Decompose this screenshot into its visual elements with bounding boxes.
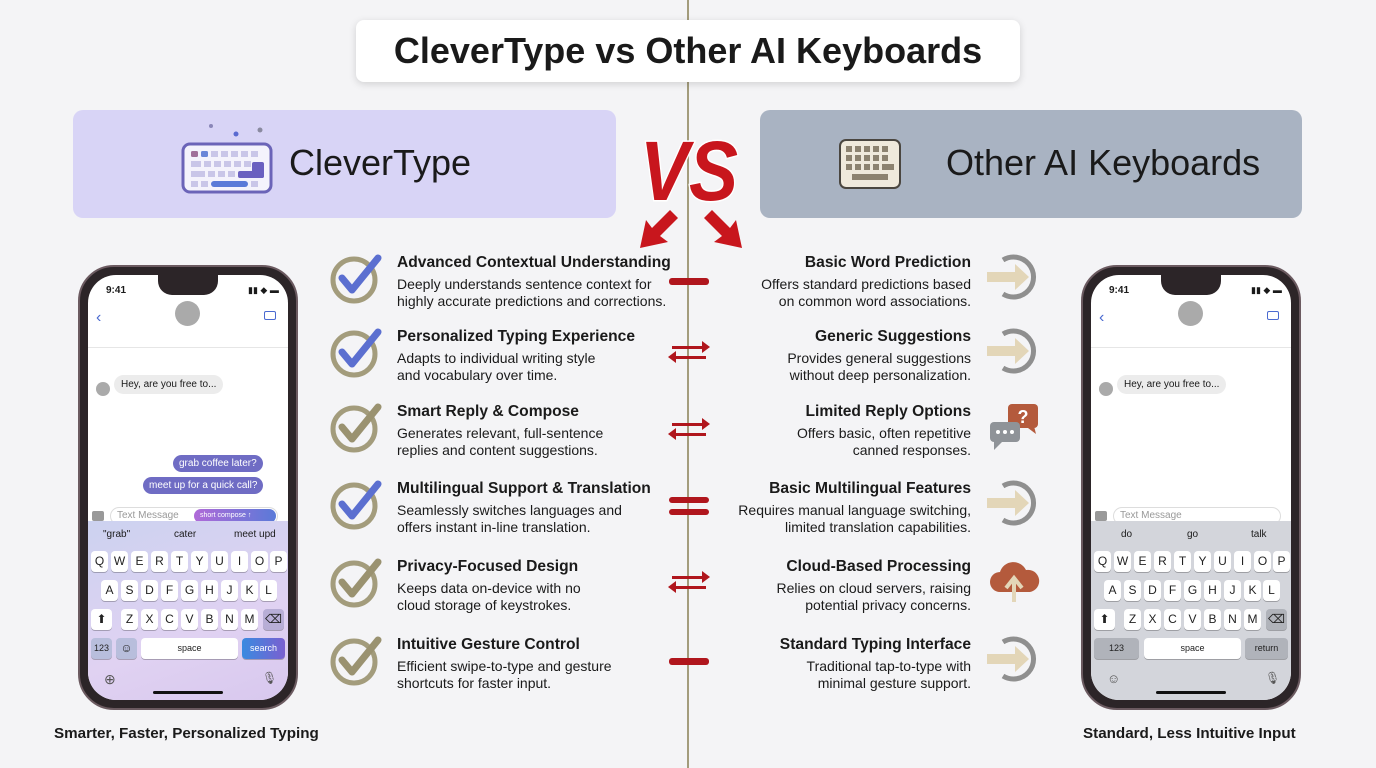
phone: CleverType: meet upd: [234, 529, 276, 540]
icon: arrow circle 2: [987, 328, 1036, 374]
row: Multilingual Support: Multilingual Support & Translation: [397, 480, 651, 497]
phone: Other keyboards: 🎙: [1265, 671, 1280, 685]
phone: Other keyboards: Y: [1198, 554, 1206, 568]
phone: Other keyboards: return: [1255, 643, 1278, 653]
icon: keyboard beige: [839, 139, 901, 189]
row: Basic Word Prediction: Offers standard predictions based: [761, 276, 971, 292]
phone: Other keyboards: Hey, are you free to...: [1124, 379, 1219, 390]
phone: Other keyboards: T: [1179, 554, 1186, 568]
center divider line: [687, 0, 689, 768]
phone: CleverType: C: [165, 612, 174, 626]
phone: CleverType: ⌫: [265, 612, 282, 626]
header: Other AI Keyboards: [760, 110, 1302, 218]
row: Standard Typing Interface: Standard Typing Interface: [780, 636, 971, 653]
phone: Other keyboards: do: [1121, 529, 1132, 540]
phone: CleverType: W: [114, 554, 125, 568]
icon: check 4: [330, 480, 382, 530]
row: Generic Suggestions: without deep personalization.: [790, 367, 971, 383]
phone: Other keyboards: F: [1169, 583, 1176, 597]
row: Cloud-Based Processing: potential privacy concerns.: [805, 597, 971, 613]
row: Basic Multilingual Features: limited translation capabilities.: [785, 519, 971, 535]
phone: CleverType: S: [125, 583, 134, 597]
phone: CleverType: G: [185, 583, 194, 597]
phone: CleverType: ☺: [120, 641, 133, 655]
phone: Other keyboards: ‹: [1099, 309, 1104, 326]
row: Personalized Typing Experience: [397, 328, 635, 383]
icon: arrow circle 4: [987, 636, 1036, 682]
phone: Other keyboards: 9:41: [1109, 285, 1129, 296]
phone: CleverType: ⬆: [96, 612, 107, 626]
phone: CleverType: "grab": [103, 529, 130, 540]
phone: CleverType: I: [238, 554, 241, 568]
phone: Other keyboards: N: [1228, 612, 1237, 626]
phone: Other keyboards: B: [1208, 612, 1216, 626]
icon: check 2: [330, 328, 382, 378]
phone: Other keyboards: C: [1168, 612, 1177, 626]
phone: CleverType: Q: [95, 554, 104, 568]
row: Generic Suggestions: Generic Suggestions: [815, 328, 971, 345]
phone: CleverType: short compose ↑: [200, 512, 251, 519]
row: Privacy-Focused Design: Privacy-Focused Design: [397, 558, 578, 575]
phone: CleverType: U: [215, 554, 224, 568]
title: [356, 20, 1020, 82]
icon: check 6: [330, 636, 382, 686]
phone: CleverType: A: [105, 583, 114, 597]
row: Personalized Typing Experience: Personalized Typing Experience: [397, 328, 635, 345]
phone: Other keyboards: H: [1208, 583, 1217, 597]
row: Advanced Contextual Understanding: highly accurate predictions and corrections.: [397, 293, 666, 309]
phone: CleverType: R: [155, 554, 164, 568]
row: Intuitive Gesture Control: Efficient swipe-to-type and gesture: [397, 658, 612, 674]
row: Cloud-Based Processing: Cloud-Based Processing: [786, 558, 971, 575]
row: Limited Reply Options: Offers basic, often repetitive: [797, 425, 971, 441]
row: Basic Word Prediction: on common word associations.: [779, 293, 971, 309]
phone: CleverType: Z: [126, 612, 133, 626]
header text: CleverType: CleverType: [289, 142, 471, 183]
phone: Other keyboards: ☺: [1107, 671, 1120, 686]
row: Basic Multilingual Features: Requires manual language switching,: [738, 502, 971, 518]
icon: chat bubbles: [990, 404, 1038, 450]
caption left: Smarter, Faster, Personalized Typing: [54, 725, 319, 742]
phone: Other keyboards: R: [1158, 554, 1167, 568]
phone: Other keyboards: U: [1218, 554, 1227, 568]
phone: CleverType: F: [166, 583, 173, 597]
row: Intuitive Gesture Control: Intuitive Gesture Control: [397, 636, 580, 653]
row: Basic Word Prediction: [761, 254, 971, 309]
title: CleverType vs Other AI Keyboards: [394, 30, 982, 71]
phone: CleverType: N: [225, 612, 234, 626]
row: Standard Typing Interface: [780, 636, 971, 691]
phone: Other keyboards: I: [1241, 554, 1244, 568]
row: Standard Typing Interface: Traditional tap-to-type with: [807, 658, 971, 674]
phone: Other keyboards: Text Message: [1120, 510, 1182, 521]
row: Multilingual Support: Seamlessly switches languages and: [397, 502, 622, 518]
phone: CleverType: cater: [174, 529, 196, 540]
phone: Other keyboards: ⬆: [1099, 612, 1110, 626]
phone: CleverType: L: [265, 583, 272, 597]
phone: Other keyboards: W: [1117, 554, 1128, 568]
phone: Other keyboards: ⌫: [1268, 612, 1285, 626]
row: Intuitive Gesture Control: shortcuts for faster input.: [397, 675, 551, 691]
phone: CleverType: ▮▮ ◆ ▬: [248, 285, 279, 295]
row: Limited Reply Options: [797, 403, 971, 458]
row: Limited Reply Options: canned responses.: [853, 442, 971, 458]
row: Multilingual Support: offers instant in-line translation.: [397, 519, 591, 535]
phone: CleverType: T: [176, 554, 183, 568]
phone: Other keyboards: X: [1148, 612, 1156, 626]
phone: CleverType: D: [145, 583, 154, 597]
center comparison symbols: [668, 278, 710, 665]
phone: CleverType: H: [205, 583, 214, 597]
icon: arrow circle 3: [987, 480, 1036, 526]
row: Generic Suggestions: Provides general suggestions: [787, 350, 971, 366]
phone: CleverType: ⊕: [104, 671, 116, 687]
phone: CleverType: J: [226, 583, 232, 597]
row: Advanced Contextual Understanding: [397, 254, 671, 309]
phone: Other keyboards: O: [1258, 554, 1267, 568]
icon: check 3: [330, 404, 382, 452]
phone: CleverType: ‹: [96, 309, 101, 326]
phone: Other keyboards: Q: [1098, 554, 1107, 568]
row: Smart Reply & Compose: [397, 403, 603, 458]
row: Limited Reply Options: Limited Reply Options: [806, 403, 971, 420]
row: Privacy-Focused Design: [397, 558, 581, 613]
row: Smart Reply & Compose: Smart Reply & Compose: [397, 403, 579, 420]
phone: Other keyboards: D: [1148, 583, 1157, 597]
phone: Other keyboards: E: [1138, 554, 1146, 568]
icon: check 5: [330, 558, 382, 608]
phone: Other keyboards: M: [1248, 612, 1258, 626]
row: Basic Multilingual Features: [738, 480, 971, 535]
phone: CleverType: K: [245, 583, 254, 597]
phone: CleverType: V: [185, 612, 194, 626]
row: Advanced Contextual Understanding: Advanced Contextual Understanding: [397, 254, 671, 271]
phone: Other keyboards: S: [1128, 583, 1136, 597]
row: Intuitive Gesture Control: [397, 636, 612, 691]
phone: CleverType: 🎙: [262, 671, 277, 685]
phone: CleverType: meet up for a quick call?: [149, 480, 257, 491]
phone: CleverType: Text Message: [117, 510, 179, 521]
phone: Other keyboards: ▮▮ ◆ ▬: [1251, 285, 1282, 295]
phone: CleverType: search: [250, 643, 277, 653]
row: Advanced Contextual Understanding: Deeply understands sentence context for: [397, 276, 652, 292]
row: Privacy-Focused Design: cloud storage of keystrokes.: [397, 597, 571, 613]
header: CleverType: [73, 110, 616, 218]
row: Personalized Typing Experience: Adapts to individual writing style: [397, 350, 595, 366]
phone: Other keyboards: 123: [1109, 643, 1124, 653]
icon: chat bubbles: ?: [1018, 407, 1028, 427]
VS badge with arrows: VS: [640, 124, 738, 218]
row: Smart Reply & Compose: Generates relevant, full-sentence: [397, 425, 603, 441]
icon: keyboard purple: [182, 124, 272, 194]
phone: CleverType: E: [135, 554, 144, 568]
phone: Other keyboards: space: [1180, 643, 1205, 653]
phone: Other keyboards: K: [1248, 583, 1256, 597]
phone: Other keyboards: go: [1187, 529, 1198, 540]
row: Basic Multilingual Features: Basic Multilingual Features: [769, 480, 971, 497]
phone: Other keyboards: G: [1188, 583, 1197, 597]
phone: Other keyboards: A: [1108, 583, 1116, 597]
phone: CleverType: M: [244, 612, 254, 626]
header text: Other AI Keyboards: Other AI Keyboards: [946, 142, 1260, 183]
phone: CleverType: Hey, are you free to...: [121, 379, 216, 390]
icon: cloud upload: [990, 562, 1040, 602]
phone: CleverType: space: [177, 643, 202, 653]
row: Cloud-Based Processing: [776, 558, 971, 613]
phone: CleverType: B: [205, 612, 214, 626]
icon: check 1: [330, 254, 382, 304]
phone: Other keyboards: J: [1230, 583, 1236, 597]
row: Standard Typing Interface: minimal gesture support.: [818, 675, 971, 691]
icon: arrow circle 1: [987, 254, 1036, 300]
phone: CleverType: grab coffee later?: [179, 458, 257, 469]
phone: Other keyboards: P: [1277, 554, 1286, 568]
row: Cloud-Based Processing: Relies on cloud servers, raising: [776, 580, 971, 596]
row: Generic Suggestions: [787, 328, 971, 383]
phone: CleverType: Y: [195, 554, 204, 568]
phone: CleverType: 123: [94, 643, 109, 653]
phone: CleverType: X: [145, 612, 154, 626]
row: Privacy-Focused Design: Keeps data on-device with no: [397, 580, 581, 596]
phone: Other keyboards: V: [1188, 612, 1196, 626]
phone: CleverType: [78, 265, 298, 710]
phone: CleverType: P: [274, 554, 282, 568]
phone: Other keyboards: Z: [1129, 612, 1136, 626]
phone: CleverType: O: [255, 554, 264, 568]
row: Basic Word Prediction: Basic Word Prediction: [805, 254, 971, 271]
phone: Other keyboards: talk: [1251, 529, 1267, 540]
phone: Other keyboards: [1081, 265, 1301, 710]
row: Personalized Typing Experience: and vocabulary over time.: [397, 367, 557, 383]
phone: CleverType: 9:41: [106, 285, 126, 296]
phone: Other keyboards: L: [1268, 583, 1275, 597]
caption right: Standard, Less Intuitive Input: [1083, 725, 1296, 742]
row: Smart Reply & Compose: replies and content suggestions.: [397, 442, 598, 458]
row: Multilingual Support: [397, 480, 651, 535]
